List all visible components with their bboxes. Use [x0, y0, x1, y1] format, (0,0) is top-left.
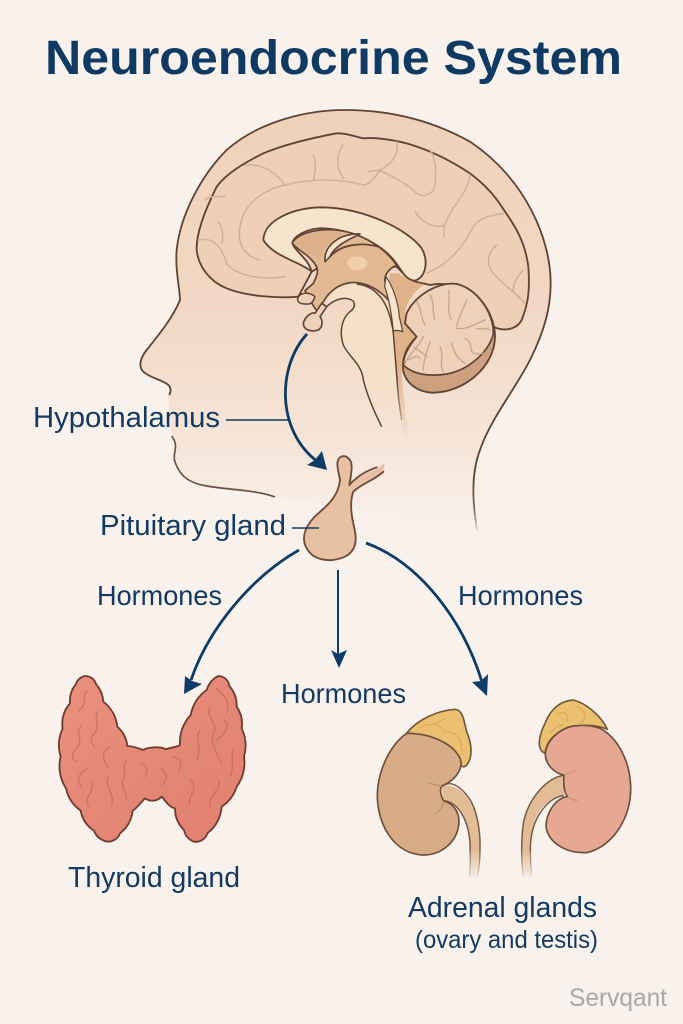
- kidneys and adrenal glands: [377, 700, 631, 878]
- pituitary gland: [303, 456, 384, 561]
- left adrenal: [407, 709, 471, 767]
- label: ovary and testis: (ovary and testis): [415, 926, 598, 954]
- right kidney: [545, 725, 631, 853]
- brainstem: [327, 277, 403, 440]
- brain cerebrum: [197, 133, 529, 329]
- thyroid gland: [59, 676, 246, 842]
- sulci: [198, 142, 525, 303]
- arrow: hypothalamus to pituitary: [285, 334, 327, 470]
- tract behind cerebellum: [389, 273, 423, 438]
- arrow: to thyroid: [184, 550, 299, 694]
- thalamus spot: [347, 256, 367, 270]
- arrow: to adrenal glands: [366, 543, 488, 696]
- left kidney: [377, 733, 461, 855]
- label: Hormones right: Hormones: [458, 580, 583, 611]
- head and brain illustration: [140, 110, 551, 530]
- right adrenal: [539, 700, 607, 753]
- label: Hypothalamus: Hypothalamus: [33, 402, 220, 434]
- label: Hormones left: Hormones: [97, 580, 222, 611]
- fornix: [325, 234, 360, 262]
- watermark: Servqant: [569, 984, 667, 1012]
- pituitary stalk in brain: [298, 293, 327, 331]
- label: Thyroid gland: Thyroid gland: [68, 862, 240, 894]
- title: Neuroendocrine System: [45, 32, 622, 85]
- arrow: downward: [331, 570, 347, 668]
- label: Pituitary gland: Pituitary gland: [100, 510, 286, 542]
- corpus callosum: [263, 207, 426, 281]
- left ureter: [442, 786, 480, 878]
- label: Adrenal glands: Adrenal glands: [408, 892, 597, 924]
- midbrain diencephalon: [292, 230, 397, 310]
- head silhouette: [140, 110, 551, 530]
- cerebellum: [403, 284, 495, 393]
- right ureter: [522, 775, 565, 877]
- label: Hormones centre: Hormones: [281, 678, 406, 709]
